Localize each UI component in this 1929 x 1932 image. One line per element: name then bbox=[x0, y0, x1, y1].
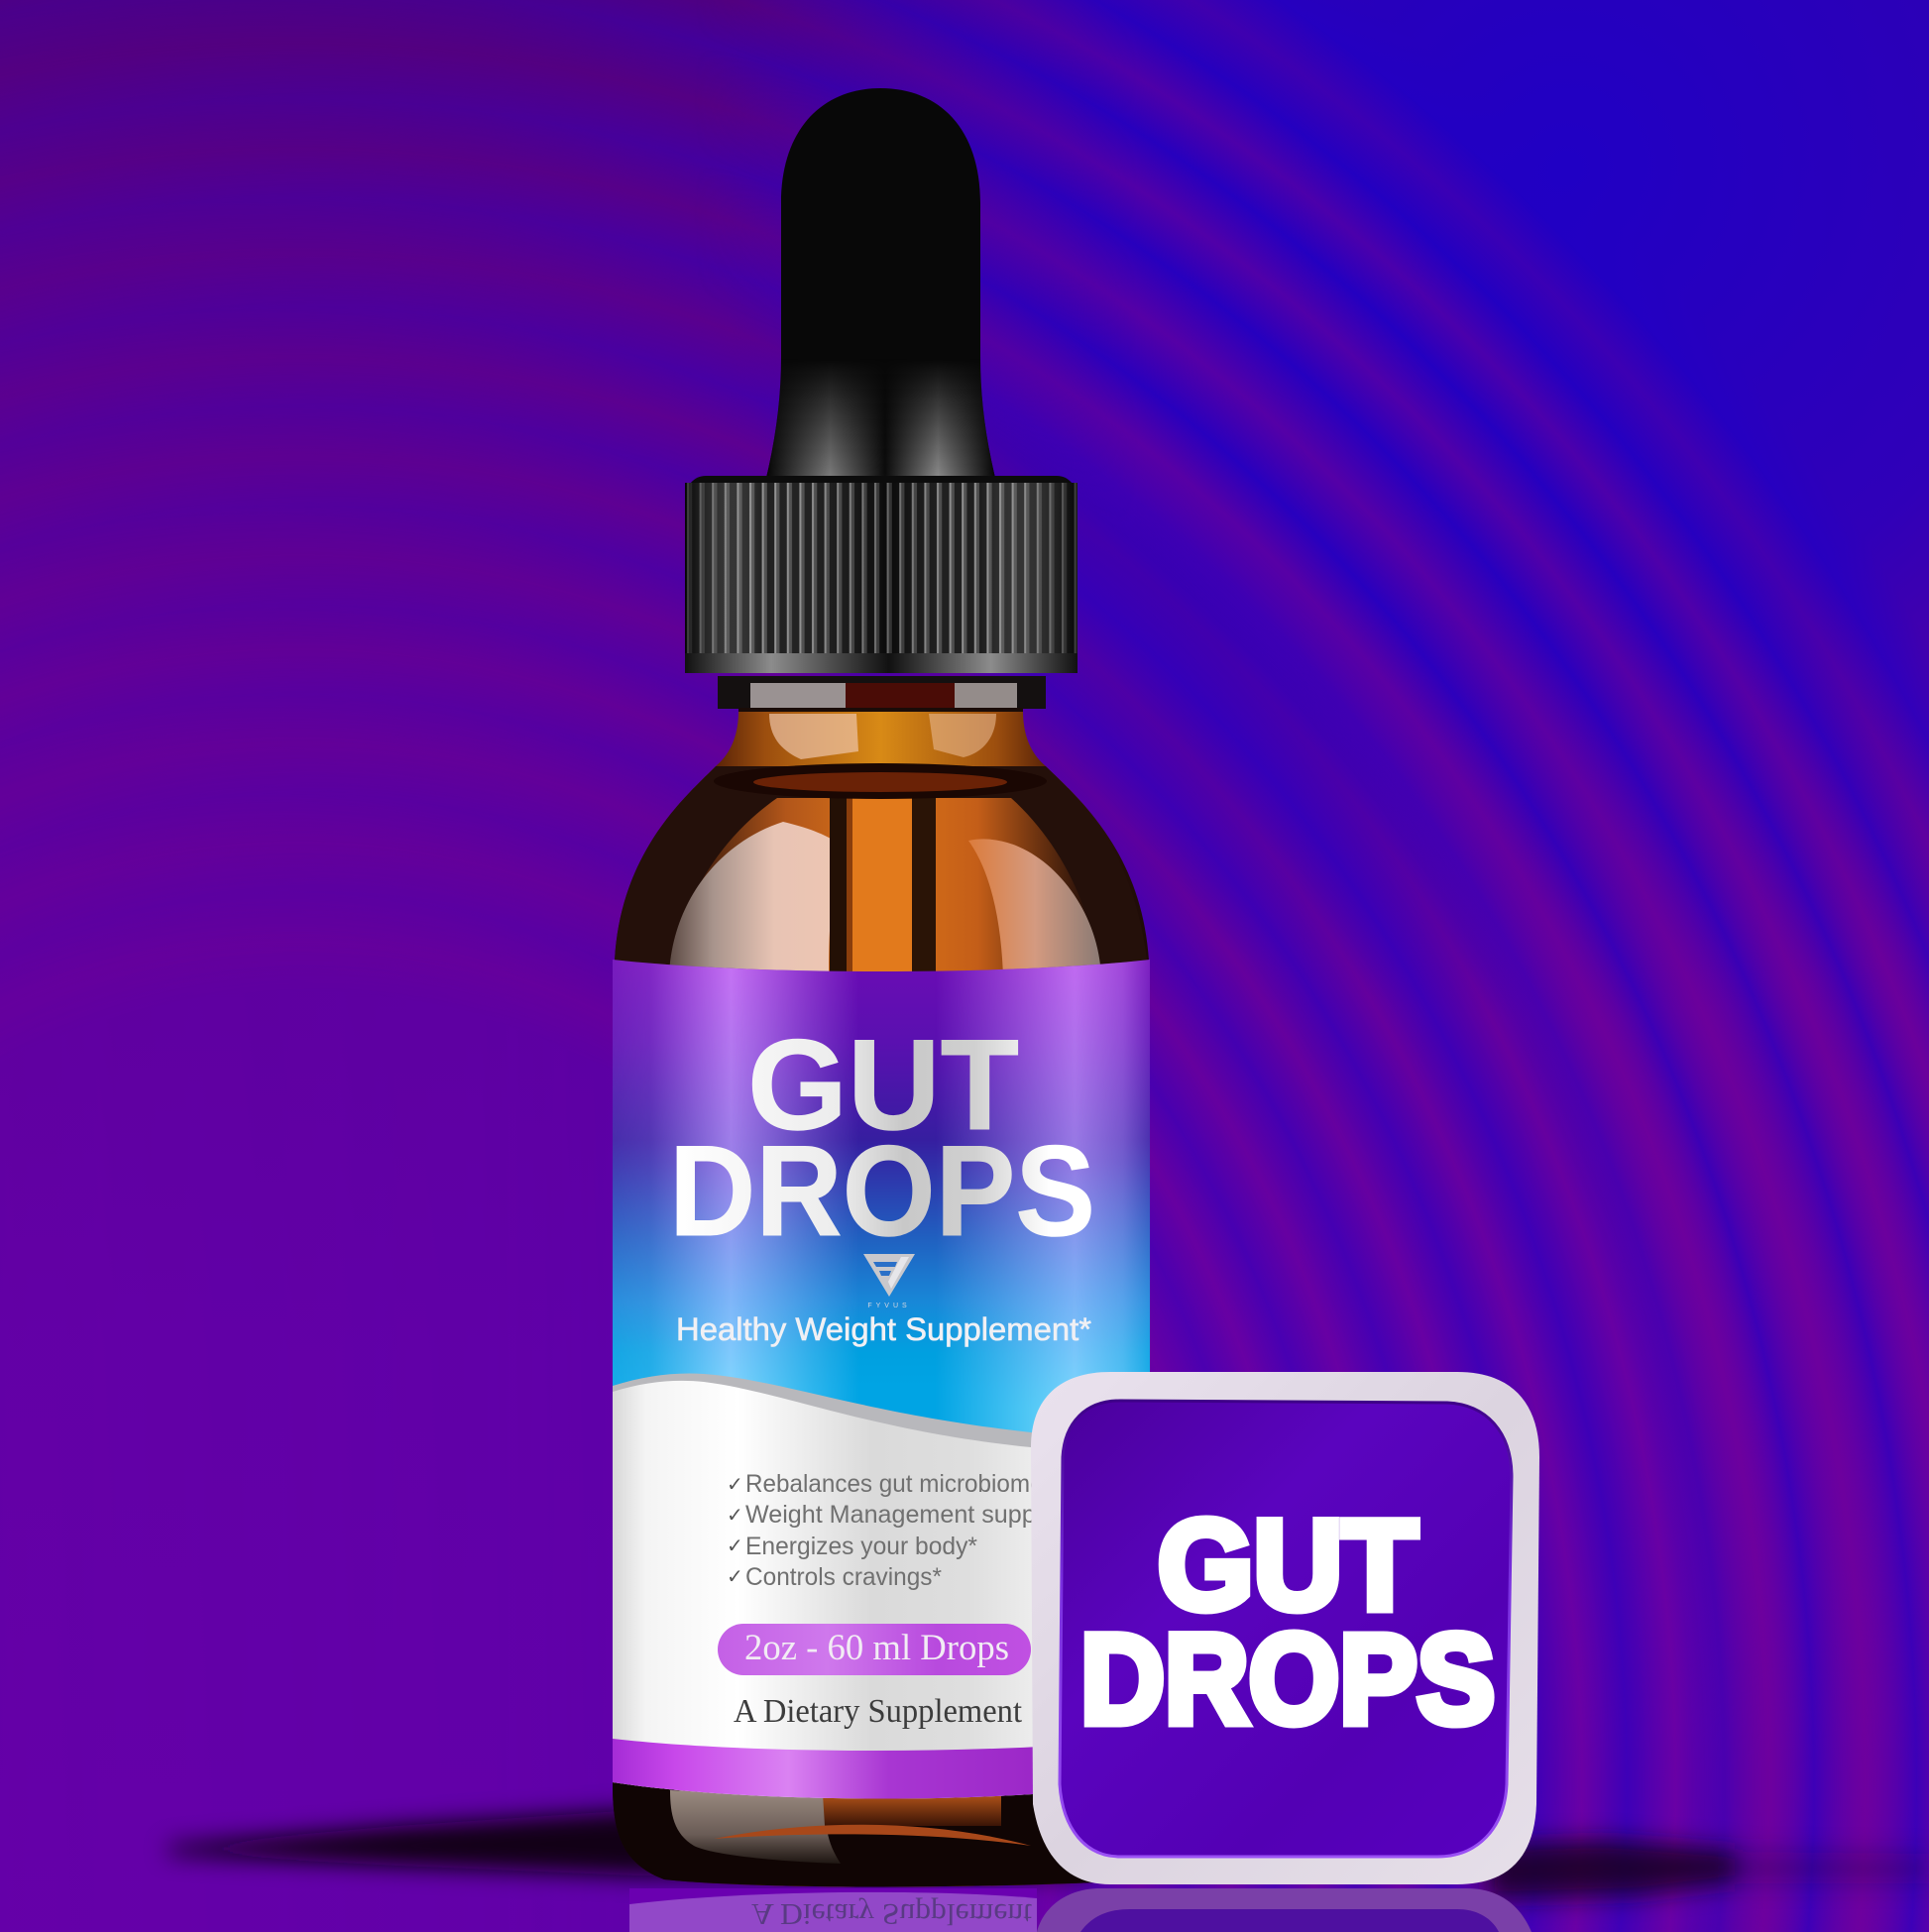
product name on label: DROPS bbox=[669, 1118, 1095, 1263]
benefits list: ✓ bbox=[727, 1534, 743, 1557]
benefits list: ✓ bbox=[727, 1503, 743, 1527]
glass highlights bbox=[670, 822, 830, 971]
bottle label bbox=[613, 952, 1150, 1814]
reflection on the floor bbox=[629, 1888, 1532, 1932]
size pill: 2oz - 60 ml Drops bbox=[744, 1628, 1009, 1668]
neck ring bbox=[718, 676, 1046, 712]
product name on label: GUT bbox=[747, 1012, 1019, 1157]
ribbed dropper cap bbox=[685, 476, 1078, 673]
badge wordmark: DROPS bbox=[1080, 1609, 1495, 1751]
grey wave band bbox=[613, 1374, 1032, 1798]
reflected card bbox=[1037, 1888, 1532, 1932]
dropper bulb bbox=[766, 88, 995, 478]
bottle base bbox=[613, 1782, 1092, 1887]
reflected label text: A Dietary Supplement bbox=[751, 1897, 1032, 1932]
benefits list: ✓ bbox=[727, 1472, 743, 1496]
dietary supplement line: A Dietary Supplement bbox=[734, 1693, 1023, 1730]
white product badge bbox=[1031, 1372, 1539, 1884]
benefits list: Weight Management support bbox=[745, 1501, 1065, 1529]
brand logo bbox=[863, 1254, 915, 1309]
purple bottom strip bbox=[613, 1739, 1033, 1798]
brand logo: FYVUS bbox=[867, 1303, 911, 1309]
badge wordmark: GUT bbox=[1158, 1495, 1418, 1637]
badge purple face bbox=[1060, 1401, 1512, 1857]
tagline: Healthy Weight Supplement* bbox=[676, 1311, 1091, 1347]
floor shadow bbox=[169, 1810, 1929, 1899]
dropper tube inside bbox=[830, 798, 847, 976]
benefits list: Controls cravings* bbox=[745, 1563, 942, 1591]
white label panel bbox=[613, 1380, 1033, 1798]
benefits list: Rebalances gut microbiome* bbox=[745, 1470, 1053, 1498]
glass bottle bbox=[595, 709, 1170, 1888]
product name on label bbox=[669, 1012, 1095, 1263]
benefits list bbox=[727, 1470, 1065, 1591]
size pill bbox=[718, 1624, 1031, 1675]
benefits list: ✓ bbox=[727, 1564, 743, 1588]
badge wordmark bbox=[1080, 1495, 1495, 1751]
liquid surface bbox=[714, 763, 1047, 799]
benefits list: Energizes your body* bbox=[745, 1533, 977, 1560]
